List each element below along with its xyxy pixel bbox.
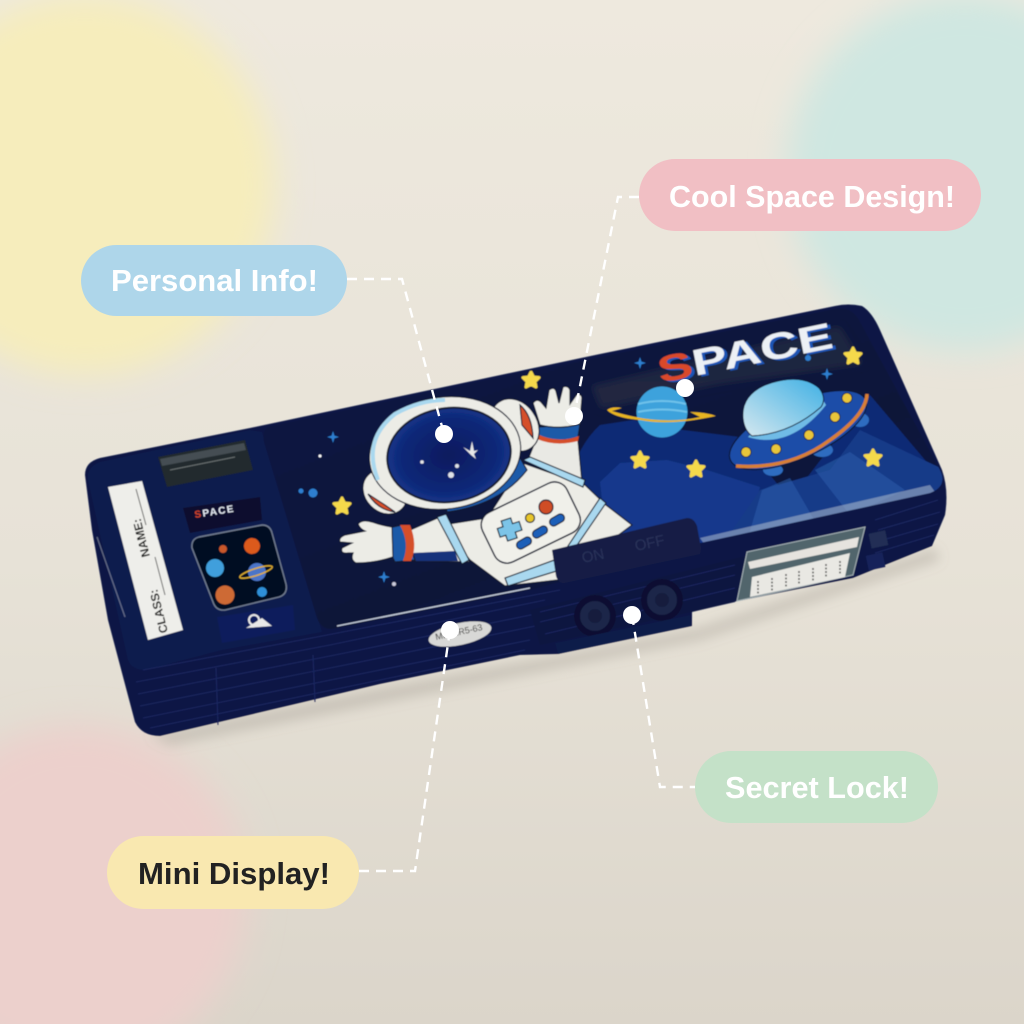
- left arm and glove: [340, 514, 470, 564]
- pencil case: [85, 300, 960, 745]
- callout: secret lock: Secret Lock!: [725, 770, 909, 805]
- on off slider: [552, 518, 701, 583]
- space button: SPACE: [194, 504, 236, 521]
- space button: [183, 497, 262, 533]
- code window: [737, 527, 888, 601]
- planet display: [192, 525, 286, 610]
- neck ring: [445, 458, 527, 512]
- lock wheels: [530, 556, 745, 654]
- ringed planet: [607, 386, 716, 438]
- leader: secret lock: [632, 615, 695, 787]
- glossy lid: [264, 319, 943, 628]
- name label: [108, 481, 183, 640]
- leader: mini display: [359, 630, 450, 871]
- model badge: MR-RR5-63: [434, 622, 483, 642]
- front grooves: [136, 500, 940, 728]
- name label: NAME:: [130, 517, 153, 559]
- callout: personal info: Personal Info!: [111, 263, 318, 298]
- on off slider: OFF: [633, 532, 666, 555]
- case body: [85, 304, 946, 736]
- chest pad: [480, 480, 582, 564]
- callout: cool space design: Cool Space Design!: [669, 179, 955, 214]
- space title: [658, 322, 837, 383]
- case shadow: [150, 548, 940, 745]
- leader: personal info: [347, 279, 444, 434]
- name label: CLASS:: [147, 588, 171, 635]
- clear window: [158, 440, 253, 487]
- callout: personal info: [81, 245, 347, 316]
- stars: [298, 348, 881, 586]
- ufo: [728, 378, 870, 477]
- astronaut button: [217, 605, 295, 643]
- right arm and glove: [527, 386, 582, 482]
- on off slider: ON: [580, 546, 606, 567]
- space title: SPACE: [657, 317, 840, 392]
- model badge: [426, 617, 494, 651]
- callout: mini display: Mini Display!: [138, 856, 330, 891]
- helmet: [362, 396, 540, 514]
- space title: SPACE: [654, 315, 836, 391]
- callout: cool space design: [639, 159, 981, 231]
- torso: [442, 463, 632, 586]
- hills: [580, 395, 926, 499]
- leader: cool space design: [574, 197, 639, 416]
- gloss bottom edge: [700, 485, 935, 545]
- gloss top: [590, 325, 865, 410]
- callout: mini display: [107, 836, 359, 909]
- left end panel: [88, 430, 322, 670]
- callout: secret lock: [695, 751, 938, 823]
- marker dots: [435, 379, 694, 639]
- chest trim: [523, 457, 585, 487]
- astronaut: [340, 386, 632, 586]
